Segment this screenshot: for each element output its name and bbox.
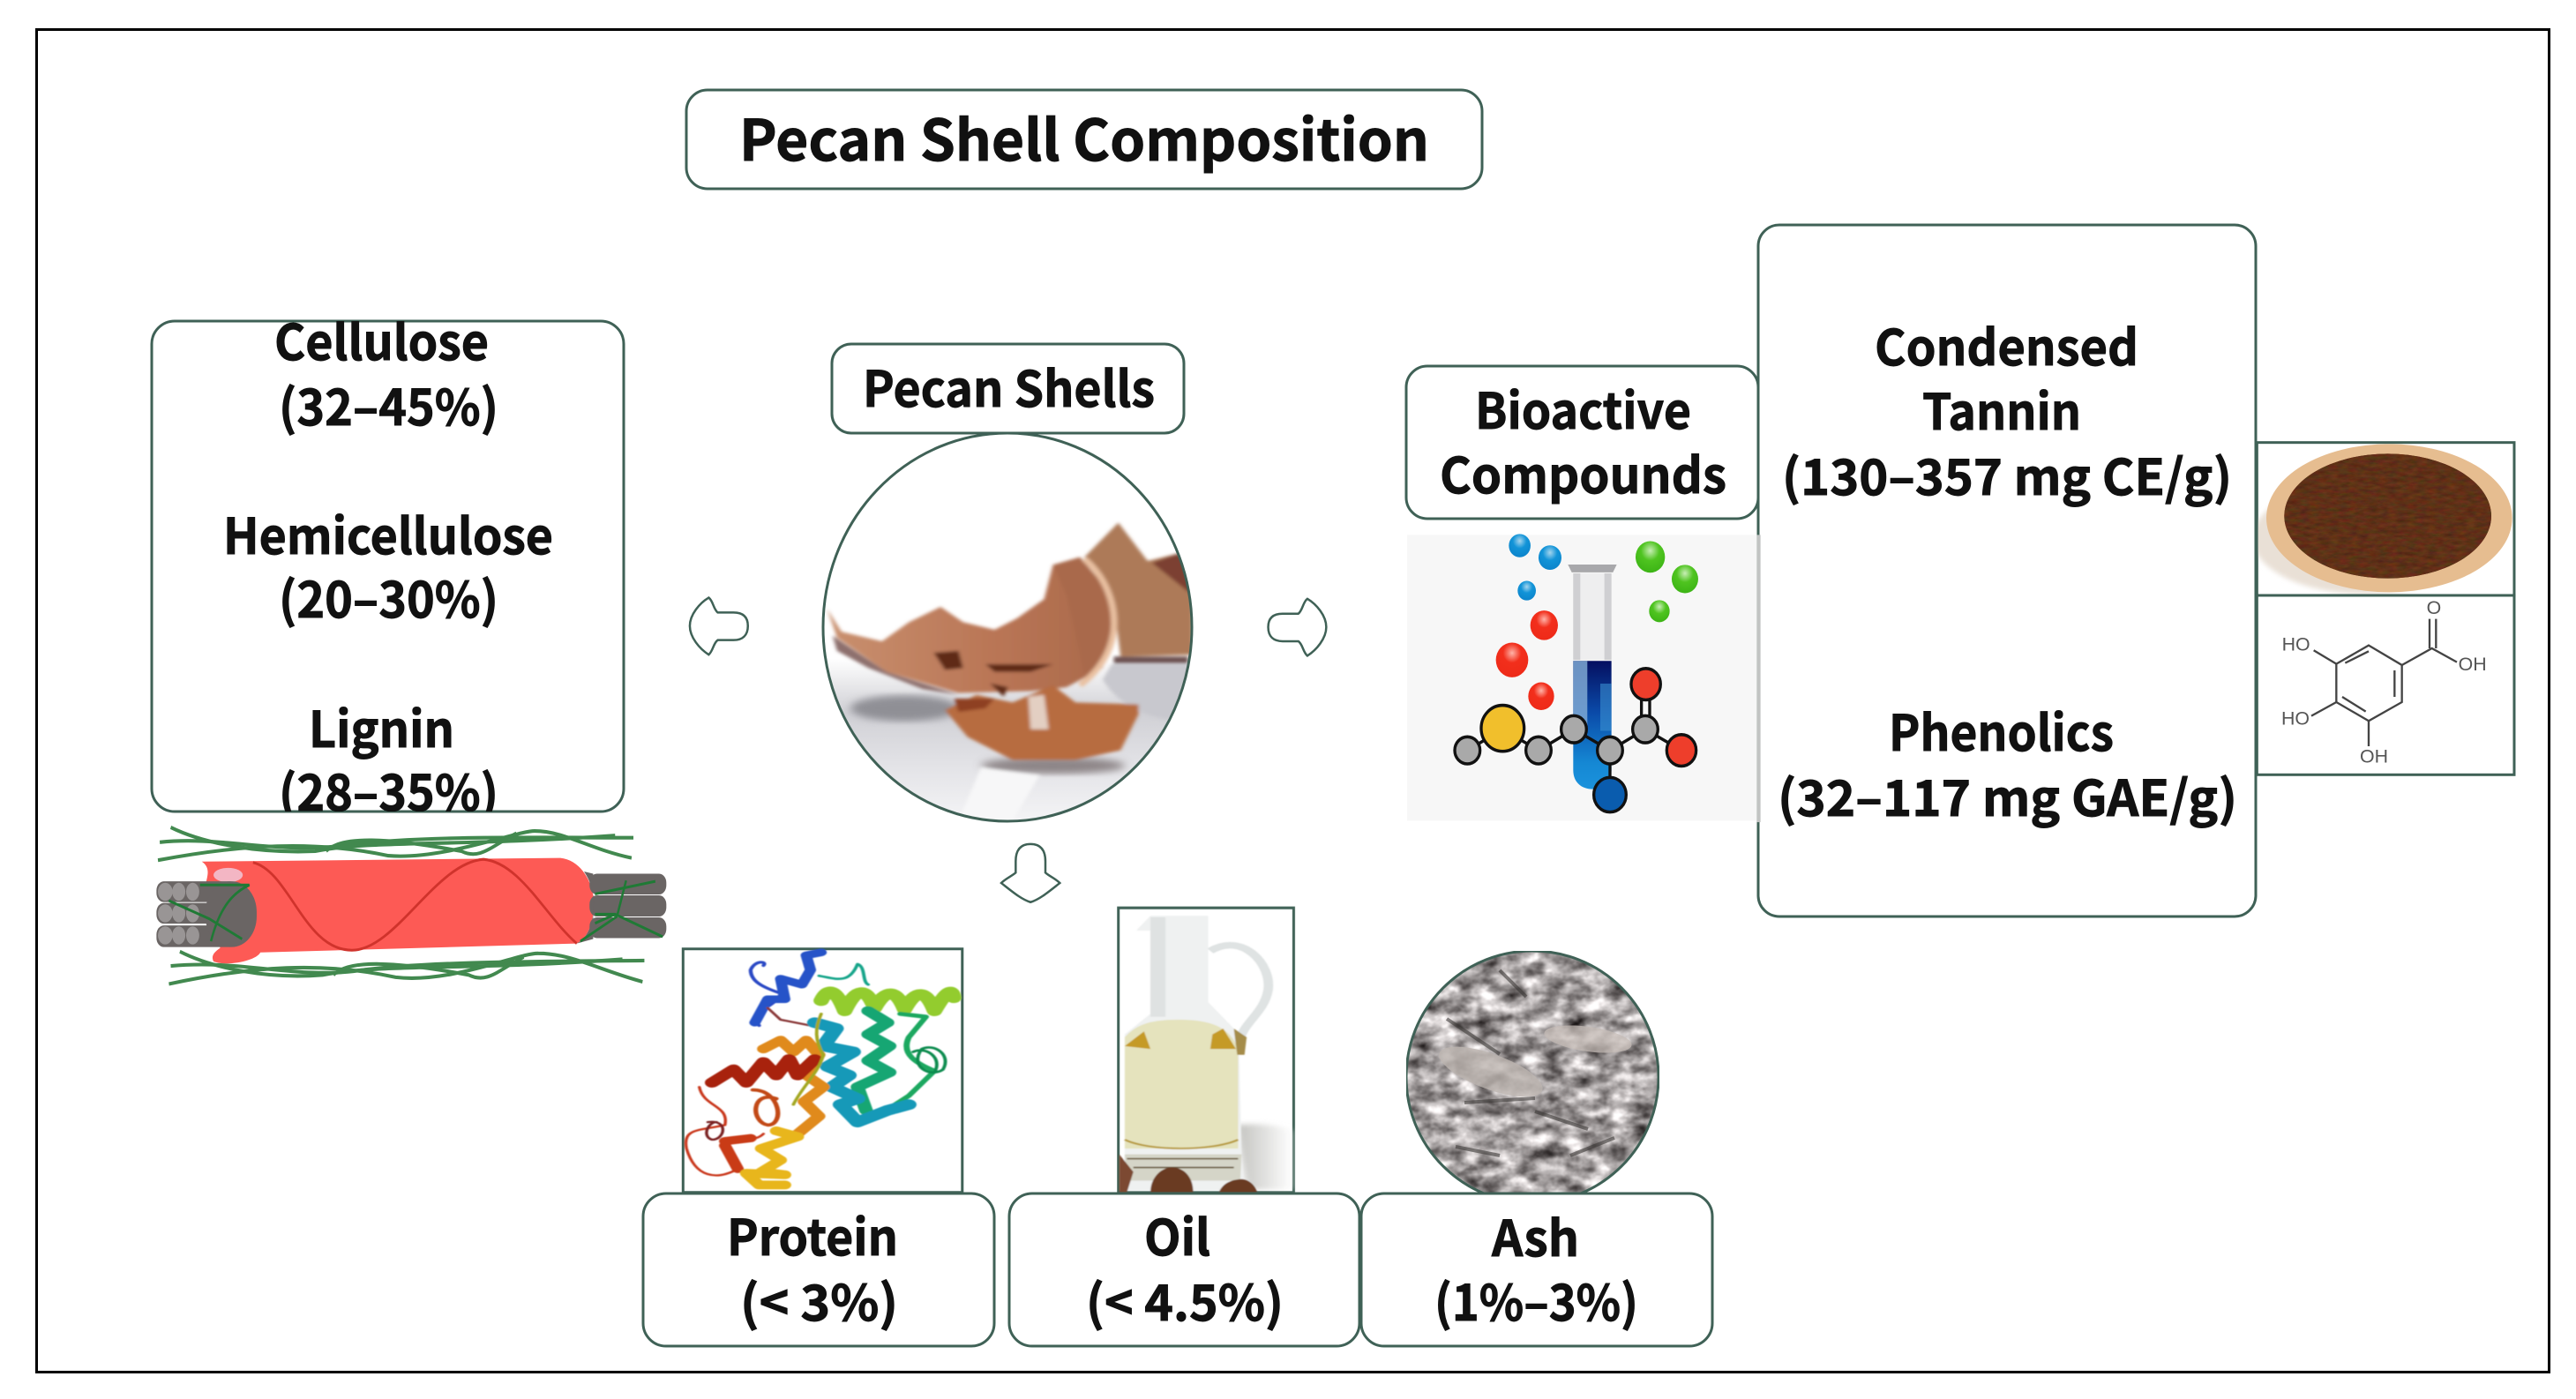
label: oil: Oil [1144,1199,1210,1270]
text: cellulose: Cellulose [274,303,489,375]
label: ash: (1%–3%) [1434,1264,1638,1335]
illustration: test tube and molecules [1407,534,1761,822]
heading: bioactive compounds: Bioactive [1475,372,1691,444]
arrow: to lignocellulose [690,598,748,655]
image: gallic acid structure: HO [2282,633,2310,655]
image: gallic acid structure: OH [2459,654,2487,675]
label: ash [1361,1193,1712,1346]
panel: condensed tannin and phenolics: (130–357 mg CE/g) [1782,438,2232,510]
text: hemicellulose: Hemicellulose [223,498,553,569]
label: ash: Ash [1491,1200,1579,1271]
heading: bioactive compounds [1406,366,1758,519]
image: gallic acid structure: OH [2360,746,2388,767]
text: phenolics: Phenolics [1889,694,2114,766]
arrow: to minor components [1001,844,1060,902]
illustration: lignocellulose fibre [156,827,666,984]
panel: condensed tannin and phenolics [1758,225,2256,916]
panel: lignocellulose composition [152,303,624,826]
heading: bioactive compounds: Compounds [1440,437,1726,508]
image: ash circle [1406,951,1659,1204]
title: Pecan Shell Composition [739,96,1429,177]
heading: pecan shells [832,344,1184,433]
panel: lignocellulose composition: (32–45%) [279,369,498,440]
label: protein: (< 3%) [740,1264,898,1335]
label: protein: Protein [727,1199,898,1270]
arrow: to bioactive compounds [1269,599,1326,655]
panel: lignocellulose composition: (20–30%) [279,561,498,632]
outline: pecan shell circle [823,433,1192,821]
image: protein ribbon structure [683,949,962,1193]
image: gallic acid structure: O [2427,597,2441,618]
text: lignin: Lignin [309,691,454,762]
image: pecan shell photo [826,521,1191,820]
label: oil [1009,1193,1359,1346]
panel: condensed tannin and phenolics: Tannin [1922,373,2081,445]
label: protein [643,1193,994,1346]
text: condensed tannin: Condensed [1875,309,2138,380]
image: tannin powder plate [2252,443,2514,595]
image: oil jug [1119,908,1293,1193]
label: oil: (< 4.5%) [1086,1264,1284,1335]
panel: lignocellulose composition: (28–35%) [279,754,498,826]
panel: condensed tannin and phenolics: (32–117 mg GAE/g) [1778,759,2237,831]
heading: pecan shells: Pecan Shells [863,350,1155,422]
image: gallic acid structure: HO [2281,707,2310,729]
image: gallic acid structure [2257,595,2514,774]
